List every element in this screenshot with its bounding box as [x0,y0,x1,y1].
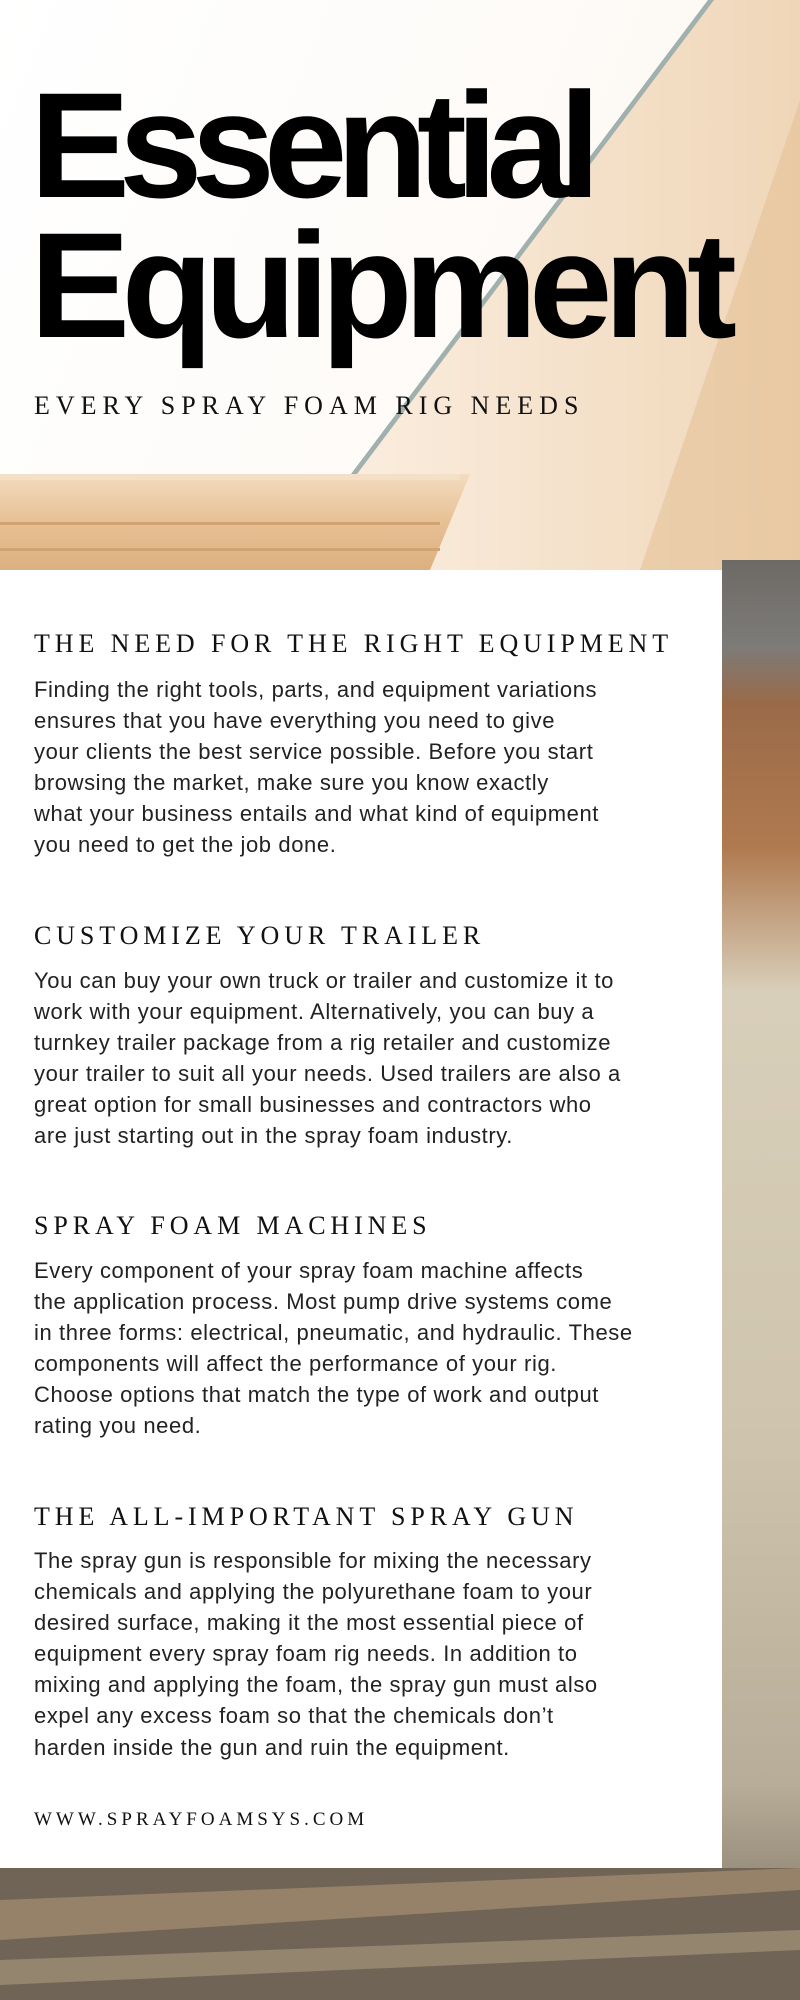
text: need for right equipment: your clients the best service possible. Before you start [34,739,593,764]
title [30,61,736,369]
text: need for right equipment [34,677,599,857]
text: need for right equipment: Finding the right tools, parts, and equipment variations [34,677,597,702]
text: customize trailer: You can buy your own truck or trailer and customize it to [34,968,614,993]
footer url: WWW.SPRAYFOAMSYS.COM [34,1809,368,1830]
text: customize trailer: turnkey trailer package from a rig retailer and customize [34,1030,611,1055]
text: need for right equipment: you need to get the job done. [34,832,336,857]
text: spray gun: mixing and applying the foam, the spray gun must also [34,1672,598,1697]
text: customize trailer: your trailer to suit all your needs. Used trailers are also a [34,1061,621,1086]
text: spray gun: The spray gun is responsible for mixing the necessary [34,1548,592,1573]
text: spray foam machines: Choose options that match the type of work and output [34,1382,599,1407]
text: customize trailer [34,968,621,1148]
title: Essential [30,61,590,229]
text: spray gun: harden inside the gun and ruin the equipment. [34,1735,510,1760]
heading: customize trailer: CUSTOMIZE YOUR TRAILER [34,921,485,950]
text: spray foam machines: rating you need. [34,1413,201,1438]
text: spray gun: equipment every spray foam rig needs. In addition to [34,1641,578,1666]
panel: content [0,570,722,1868]
text: need for right equipment: ensures that you have everything you need to give [34,708,555,733]
text: spray gun [34,1548,598,1760]
text: spray foam machines: the application process. Most pump drive systems come [34,1289,612,1314]
subtitle: EVERY SPRAY FOAM RIG NEEDS [34,391,584,420]
text: spray gun: chemicals and applying the polyurethane foam to your [34,1579,592,1604]
title: Equipment [30,201,728,369]
text: need for right equipment: what your business entails and what kind of equipment [34,801,599,826]
text: need for right equipment: browsing the market, make sure you know exactly [34,770,549,795]
text: spray gun: expel any excess foam so that the chemicals don’t [34,1703,554,1728]
text: spray foam machines [34,1258,633,1438]
heading: spray gun: THE ALL-IMPORTANT SPRAY GUN [34,1502,578,1531]
text: spray foam machines: Every component of your spray foam machine affects [34,1258,583,1283]
text: customize trailer: are just starting out in the spray foam industry. [34,1123,513,1148]
text: spray foam machines: in three forms: electrical, pneumatic, and hydraulic. These [34,1320,633,1345]
text: customize trailer: great option for small businesses and contractors who [34,1092,592,1117]
heading: need for right equipment: THE NEED FOR THE RIGHT EQUIPMENT [34,629,673,658]
heading: spray foam machines: SPRAY FOAM MACHINES [34,1211,431,1240]
text: spray gun: desired surface, making it the most essential piece of [34,1610,584,1635]
text: spray foam machines: components will affect the performance of your rig. [34,1351,557,1376]
text: customize trailer: work with your equipment. Alternatively, you can buy a [34,999,594,1024]
